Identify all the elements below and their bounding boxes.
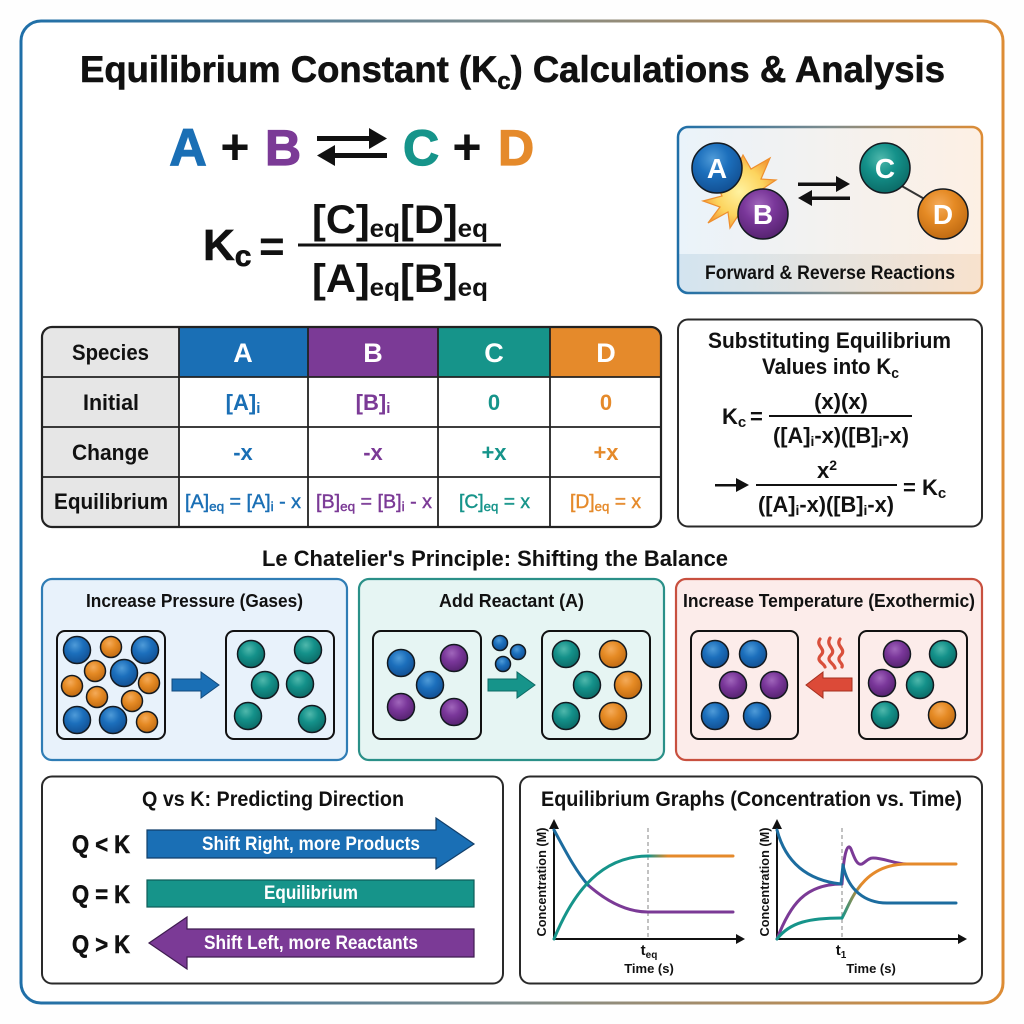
panel: equilibrium graphs bbox=[520, 776, 982, 984]
row: Q less than K: Shift Right, more Products bbox=[202, 834, 420, 855]
Kc expression: eq bbox=[370, 215, 400, 243]
Kc expression: c bbox=[235, 240, 251, 273]
band caption: Forward & Reverse Reactions bbox=[705, 263, 955, 284]
panel: ICE table bbox=[42, 327, 661, 527]
molecule bond bbox=[900, 185, 928, 201]
reaction equation: B bbox=[265, 120, 301, 176]
container: products side bbox=[691, 631, 798, 739]
formula: Kc substitution: c bbox=[738, 414, 746, 431]
Kc expression: eq bbox=[458, 215, 488, 243]
formula: Kc substitution: = bbox=[750, 404, 763, 429]
column headers: B bbox=[363, 338, 383, 368]
column A values: [A] bbox=[226, 390, 256, 415]
formula: Kc substitution: K bbox=[722, 404, 738, 429]
column C values: +x bbox=[481, 440, 507, 465]
reaction equation bbox=[169, 119, 534, 177]
panel heading: Substituting Equilibrium bbox=[708, 328, 951, 353]
row: Q greater than K: Shift Left, more Reactants bbox=[204, 933, 418, 954]
column B values: = [B] bbox=[355, 492, 402, 513]
line chart: disturbance at t1 bbox=[757, 819, 967, 976]
column A values: -x bbox=[233, 440, 254, 465]
row headers: Change bbox=[72, 440, 149, 465]
column D values: [D] bbox=[570, 492, 594, 513]
Kc expression: [B] bbox=[400, 257, 458, 301]
arrow: shift right bbox=[172, 672, 219, 698]
column B values bbox=[316, 390, 433, 514]
column B values: i bbox=[402, 499, 405, 514]
formula: Kc substitution: i bbox=[879, 433, 882, 449]
line chart: approach to equilibrium: eq bbox=[646, 950, 657, 961]
column D values bbox=[570, 390, 642, 514]
formula: Kc substitution: -x)([B] bbox=[814, 423, 879, 448]
formula: Kc substitution: -x) bbox=[882, 423, 909, 448]
column A values: - x bbox=[274, 492, 302, 513]
panel title: Add Reactant (A) bbox=[439, 591, 584, 611]
formula: simplified: i bbox=[864, 502, 867, 518]
title: Equilibrium Constant (K bbox=[80, 49, 503, 90]
panel title: Increase Pressure (Gases) bbox=[86, 591, 303, 611]
added reactant particles bbox=[492, 636, 526, 672]
Kc expression: K bbox=[203, 221, 235, 270]
reaction equation: A bbox=[169, 119, 207, 177]
formula: Kc substitution: ([A] bbox=[773, 423, 811, 448]
formula: simplified: -x)([B] bbox=[799, 492, 864, 517]
panel: increase temperature bbox=[676, 579, 982, 760]
Kc expression: = bbox=[259, 222, 285, 271]
row headers: Equilibrium bbox=[54, 489, 168, 514]
panel heading bbox=[708, 328, 951, 382]
Kc expression: [C] bbox=[312, 198, 368, 242]
panel: add reactant bbox=[359, 579, 664, 760]
row: Q less than K: Q < K bbox=[72, 831, 130, 859]
column B values: eq bbox=[340, 499, 355, 514]
column D values: = x bbox=[609, 492, 642, 513]
panel title: Increase Temperature (Exothermic) bbox=[683, 591, 975, 611]
section heading: Le Chatelier: Le Chatelier's Principle: Shifting the Balance bbox=[262, 546, 728, 571]
row: Q greater than K: Q > K bbox=[72, 931, 130, 959]
container: reactants side bbox=[859, 631, 967, 739]
molecule A bbox=[692, 143, 742, 193]
line chart: disturbance at t1: Concentration (M) bbox=[757, 828, 772, 936]
title: c bbox=[497, 68, 511, 95]
row headers: Species bbox=[72, 340, 149, 365]
formula: Kc substitution: i bbox=[811, 433, 814, 449]
row: Q equals K: Equilibrium bbox=[264, 883, 358, 904]
molecule C bbox=[860, 143, 910, 193]
reaction equation: + bbox=[220, 119, 250, 175]
panel heading: Values into K bbox=[762, 354, 900, 379]
line chart: disturbance at t1: Time (s) bbox=[846, 961, 896, 976]
formula: simplified: ([A] bbox=[758, 492, 796, 517]
column B values: [B] bbox=[316, 492, 339, 513]
column A values: eq bbox=[209, 499, 224, 514]
arrow bbox=[715, 478, 749, 492]
formula: simplified: x bbox=[817, 458, 829, 483]
formula: simplified: = K bbox=[903, 475, 938, 500]
column C values bbox=[459, 390, 531, 514]
panel: forward and reverse reactions bbox=[678, 127, 982, 293]
column D values: +x bbox=[593, 440, 619, 465]
molecule A: A bbox=[707, 153, 727, 184]
Kc expression: eq bbox=[370, 274, 400, 302]
column C values: 0 bbox=[488, 390, 500, 415]
reaction equation: C bbox=[403, 120, 439, 176]
line chart: approach to equilibrium: Time (s) bbox=[624, 961, 674, 976]
line chart: disturbance at t1: t bbox=[836, 942, 841, 959]
container: before bbox=[373, 631, 481, 739]
molecule C: C bbox=[875, 153, 895, 184]
column A values: i bbox=[271, 499, 274, 514]
formula: simplified: i bbox=[796, 502, 799, 518]
icon: reaction arrows bbox=[798, 176, 850, 206]
reaction equation: D bbox=[498, 120, 534, 176]
molecule D bbox=[918, 189, 968, 239]
column headers: C bbox=[484, 338, 504, 368]
molecule D: D bbox=[933, 199, 953, 230]
title: ) Calculations & Analysis bbox=[511, 49, 945, 90]
column C values: = x bbox=[498, 492, 531, 513]
column B values: -x bbox=[363, 440, 384, 465]
column A values: = [A] bbox=[224, 492, 271, 513]
row: Q equals K: Q = K bbox=[72, 881, 130, 909]
reaction equation: + bbox=[452, 119, 482, 175]
Kc expression: [A] bbox=[312, 257, 368, 301]
icon: heat waves bbox=[819, 638, 843, 668]
row headers: Initial bbox=[83, 390, 139, 415]
column headers: D bbox=[596, 338, 616, 368]
formula: simplified: -x) bbox=[867, 492, 894, 517]
formula: Kc substitution: (x)(x) bbox=[814, 389, 868, 414]
column C values: [C] bbox=[459, 492, 483, 513]
column headers bbox=[233, 338, 616, 368]
column B values: [B] bbox=[356, 390, 386, 415]
line chart: disturbance at t1: 1 bbox=[841, 950, 847, 961]
panel: increase pressure bbox=[42, 579, 347, 760]
formula: Kc substitution bbox=[722, 389, 912, 449]
row: Q equals K bbox=[72, 880, 474, 909]
container: before bbox=[57, 631, 165, 739]
icon: collision starburst bbox=[703, 155, 776, 228]
line chart: approach to equilibrium: Concentration (M) bbox=[534, 828, 549, 936]
column C values: eq bbox=[484, 499, 498, 514]
column D values: 0 bbox=[600, 390, 612, 415]
column A values: [A] bbox=[185, 492, 208, 513]
container: after bbox=[226, 631, 334, 739]
panel: Q vs K bbox=[42, 776, 503, 984]
formula: simplified: 2 bbox=[829, 457, 837, 473]
column B values: i bbox=[386, 400, 390, 417]
panel heading: Equilibrium Graphs (Concentration vs. Time) bbox=[541, 788, 962, 811]
formula: simplified bbox=[756, 457, 946, 518]
panel heading: Q vs K: Predicting Direction bbox=[142, 788, 404, 811]
Kc expression bbox=[203, 198, 501, 302]
arrow: shift left bbox=[806, 672, 852, 698]
row: Q less than K bbox=[72, 818, 474, 869]
container: after bbox=[542, 631, 650, 739]
column headers: A bbox=[233, 338, 253, 368]
Kc expression: [D] bbox=[400, 198, 458, 242]
formula: simplified: c bbox=[938, 485, 946, 502]
molecule B bbox=[738, 189, 788, 239]
icon: equilibrium arrows bbox=[317, 128, 387, 166]
column D values: eq bbox=[595, 499, 609, 514]
Kc expression: eq bbox=[458, 274, 488, 302]
column A values bbox=[185, 390, 302, 514]
panel heading: c bbox=[891, 365, 899, 382]
line chart: approach to equilibrium: t bbox=[641, 942, 646, 959]
column A values: i bbox=[256, 400, 260, 417]
line chart: approach to equilibrium bbox=[534, 819, 745, 976]
row headers bbox=[54, 340, 168, 514]
row: Q greater than K bbox=[72, 917, 474, 969]
molecule B: B bbox=[753, 199, 773, 230]
panel: substituting equilibrium values bbox=[678, 320, 982, 526]
arrow: shift right bbox=[488, 672, 535, 698]
column B values: - x bbox=[405, 492, 433, 513]
